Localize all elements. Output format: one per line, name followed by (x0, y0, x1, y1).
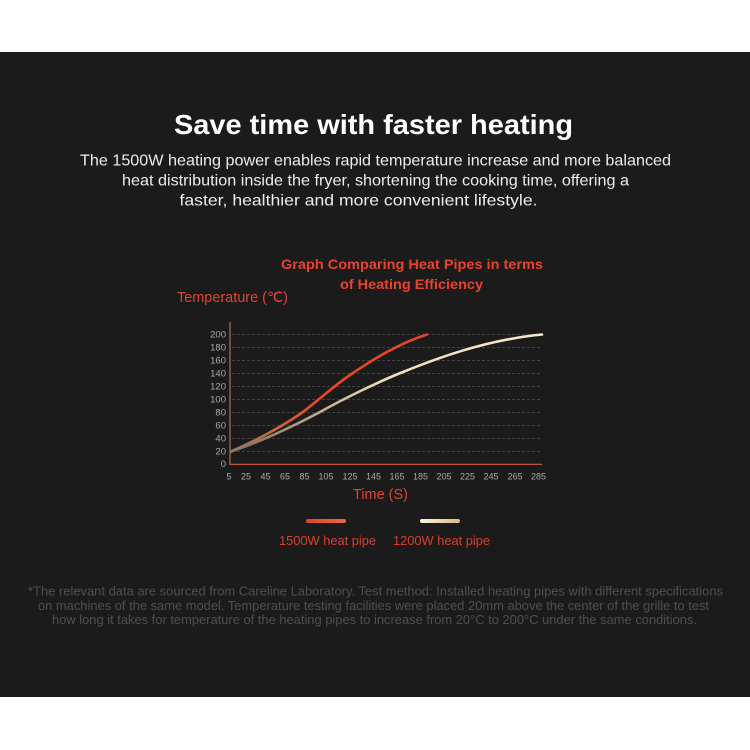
x-axis labels (226, 472, 546, 482)
y-axis title: Temperature (℃) (177, 290, 288, 306)
y-axis labels: 100 (210, 394, 226, 406)
y-axis labels: 20 (215, 446, 226, 458)
y-axis labels: 0 (221, 459, 226, 470)
x-axis labels: 225 (460, 472, 475, 482)
chart heading (281, 256, 543, 292)
legend (279, 519, 490, 548)
intro text block: faster, healthier and more convenient lifestyle. (180, 192, 538, 210)
legend item: 1200W heat pipe: 1200W heat pipe (393, 533, 490, 548)
y-axis labels: 180 (210, 342, 226, 354)
x-axis labels: 165 (389, 472, 405, 482)
y-axis labels: 200 (210, 330, 226, 340)
x-axis labels: 285 (531, 472, 546, 482)
chart heading: of Heating Efficiency (340, 276, 483, 292)
x-axis labels: 105 (318, 472, 334, 482)
x-axis labels: 5 (226, 472, 232, 482)
legend item: 1200W heat pipe (393, 519, 490, 548)
footnote (28, 584, 723, 627)
y-axis labels (210, 330, 226, 470)
legend item: 1500W heat pipe: 1500W heat pipe (279, 533, 376, 548)
intro text block: heat distribution inside the fryer, shortening the cooking time, offering a (122, 172, 629, 190)
x-axis labels: 245 (483, 472, 499, 482)
curve: 1500W heat pipe (231, 334, 427, 452)
y-axis labels: 60 (215, 420, 226, 432)
intro text block (80, 152, 671, 210)
x-axis title: Time (S) (353, 487, 408, 503)
chart heading: Graph Comparing Heat Pipes in terms (281, 256, 543, 272)
footnote: how long it takes for temperature of the heating pipes to increase from 20°C to 200°C under the same conditions. (52, 613, 697, 627)
y-axis labels: 40 (215, 434, 226, 444)
x-axis labels: 65 (280, 472, 290, 482)
title: Save time with faster heating (174, 109, 573, 140)
x-axis labels: 25 (241, 472, 251, 482)
y-axis labels: 80 (215, 408, 226, 418)
y-axis labels: 160 (210, 356, 226, 366)
x-axis labels: 265 (507, 472, 523, 482)
intro text block: The 1500W heating power enables rapid temperature increase and more balanced (80, 152, 671, 170)
legend item: 1500W heat pipe (279, 519, 376, 548)
y-axis labels: 120 (210, 382, 226, 392)
x-axis labels: 185 (413, 472, 428, 482)
x-axis labels: 85 (299, 472, 310, 482)
line chart (177, 290, 546, 503)
x-axis labels: 125 (342, 472, 358, 482)
x-axis labels: 45 (260, 472, 271, 482)
footnote: *The relevant data are sourced from Careline Laboratory. Test method: Installed heating pipes with different specifications (28, 584, 723, 598)
x-axis labels: 205 (436, 472, 452, 482)
x-axis labels: 145 (366, 472, 381, 482)
footnote: on machines of the same model. Temperature testing facilities were placed 20mm above the center of the grille to test (38, 599, 710, 613)
axes (230, 322, 542, 465)
grid lines (232, 334, 542, 452)
y-axis labels: 140 (210, 368, 226, 380)
curve: 1200W heat pipe (231, 334, 542, 452)
